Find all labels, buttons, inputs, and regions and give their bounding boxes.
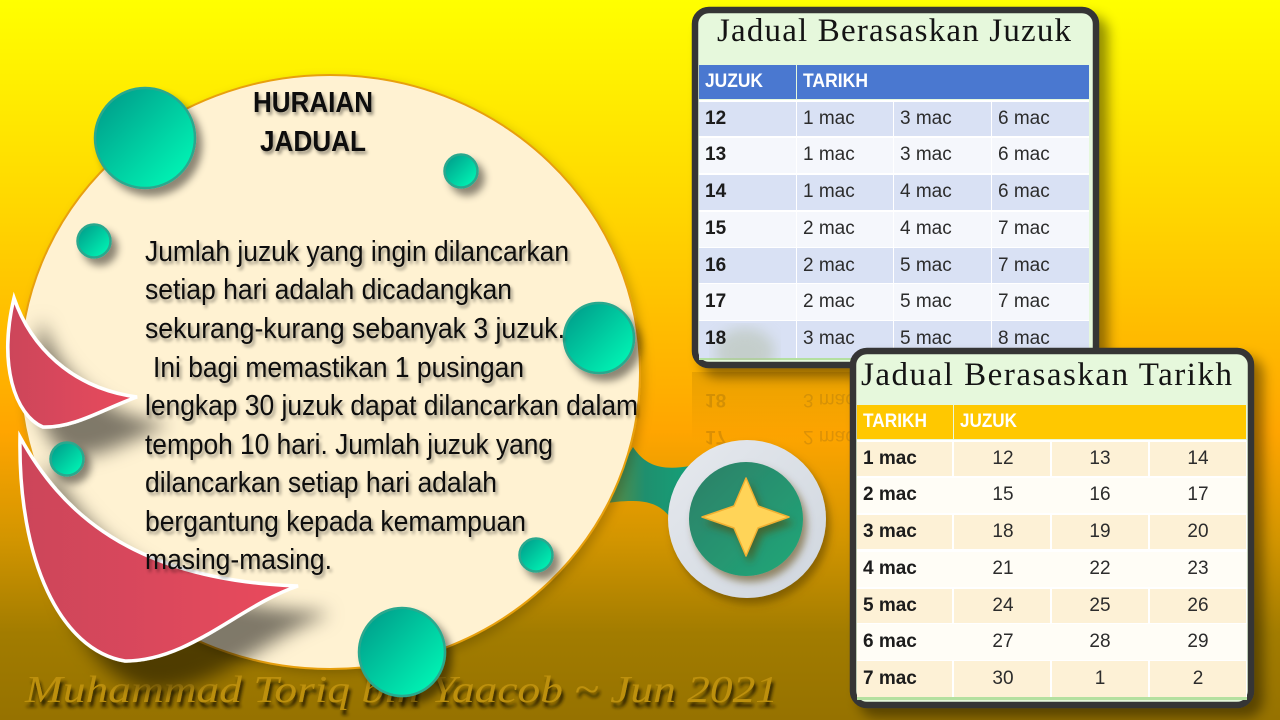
- table grid: juzuk rows: 2 mac: [803, 291, 855, 312]
- table grid: date rows: 1: [1095, 668, 1105, 689]
- shape: lower red fin: [20, 437, 298, 661]
- table grid: date rows: 5 mac: [863, 595, 917, 616]
- table grid: date rows: 16: [1089, 484, 1111, 505]
- body text: masing-masing.: [145, 544, 332, 576]
- table grid: date rows: 30: [992, 668, 1014, 689]
- table grid: juzuk rows: 7 mac: [998, 291, 1050, 312]
- reflection of table: 18: [705, 389, 726, 410]
- title: table by date: Jadual Berasaskan Tarikh: [861, 357, 1232, 393]
- reflection of table: 17: [705, 426, 726, 447]
- reflection of table: 3 mac: [803, 389, 855, 410]
- table grid: juzuk rows: 18: [705, 328, 726, 349]
- table grid: date rows: 28: [1089, 631, 1111, 652]
- table grid: juzuk rows: 16: [705, 255, 726, 276]
- table grid: juzuk rows: 7 mac: [998, 255, 1050, 276]
- table grid: juzuk rows: 13: [705, 144, 726, 165]
- title: table by juzuk: Jadual Berasaskan Juzuk: [717, 13, 1072, 49]
- table grid: date rows: 1 mac: [863, 448, 917, 469]
- table grid: date rows: 27: [992, 631, 1014, 652]
- table grid: juzuk rows: 17: [705, 291, 726, 312]
- body text: bergantung kepada kemampuan: [145, 506, 526, 538]
- table grid: date rows: 24: [992, 595, 1014, 616]
- table grid: juzuk rows: 5 mac: [900, 291, 952, 312]
- table grid: date rows: 26: [1187, 595, 1209, 616]
- reflection of table: 2 mac: [803, 426, 855, 447]
- table grid: juzuk rows: 3 mac: [900, 108, 952, 129]
- connector: [600, 447, 690, 520]
- table grid: date rows: 17: [1187, 484, 1209, 505]
- panel: description circle: [20, 75, 640, 669]
- table grid: date rows: 22: [1089, 558, 1111, 579]
- table grid: date rows: 4 mac: [863, 558, 917, 579]
- table grid: juzuk rows: JUZUK: [705, 71, 763, 92]
- table grid: date rows: 3 mac: [863, 521, 917, 542]
- body text: sekurang-kurang sebanyak 3 juzuk.: [145, 313, 565, 345]
- panel: table by date: [853, 351, 1251, 705]
- shape: upper red fin: [8, 298, 137, 427]
- table grid: date rows: 12: [992, 448, 1014, 469]
- table grid: juzuk rows: 5 mac: [900, 255, 952, 276]
- table grid: date rows: JUZUK: [960, 411, 1017, 432]
- table grid: date rows: 2: [1193, 668, 1203, 689]
- heading: HURAIAN: [253, 87, 373, 119]
- table grid: date rows: 29: [1187, 631, 1209, 652]
- table grid: date rows: 7 mac: [863, 668, 917, 689]
- table grid: date rows: TARIKH: [863, 411, 927, 432]
- table grid: date rows: 19: [1089, 521, 1111, 542]
- heading: JADUAL: [260, 126, 366, 158]
- icon: star medallion: [668, 440, 826, 598]
- table grid: juzuk rows: 4 mac: [900, 181, 952, 202]
- body text: Jumlah juzuk yang ingin dilancarkan: [145, 236, 569, 268]
- table grid: juzuk rows: 5 mac: [900, 328, 952, 349]
- table grid: juzuk rows: 6 mac: [998, 181, 1050, 202]
- body text: tempoh 10 hari. Jumlah juzuk yang: [145, 429, 553, 461]
- table grid: juzuk rows: [699, 65, 1089, 376]
- panel: table by juzuk: [695, 10, 1096, 376]
- table grid: juzuk rows: 2 mac: [803, 255, 855, 276]
- body text: [145, 236, 638, 576]
- table grid: juzuk rows: 1 mac: [803, 108, 855, 129]
- body text: setiap hari adalah dicadangkan: [145, 274, 512, 306]
- table grid: date rows: 6 mac: [863, 631, 917, 652]
- table grid: date rows: 15: [992, 484, 1014, 505]
- reflection of table: [692, 372, 855, 447]
- table grid: date rows: 2 mac: [863, 484, 917, 505]
- table grid: juzuk rows: TARIKH: [803, 71, 868, 92]
- table grid: date rows: 14: [1187, 448, 1209, 469]
- table grid: date rows: 13: [1089, 448, 1111, 469]
- table grid: juzuk rows: 3 mac: [803, 328, 855, 349]
- body text: lengkap 30 juzuk dapat dilancarkan dalam: [145, 390, 638, 422]
- body text: Ini bagi memastikan 1 pusingan: [153, 352, 524, 384]
- table grid: juzuk rows: 6 mac: [998, 108, 1050, 129]
- table grid: juzuk rows: 15: [705, 218, 727, 239]
- table grid: juzuk rows: 1 mac: [803, 144, 855, 165]
- body text: dilancarkan setiap hari adalah: [145, 467, 497, 499]
- table grid: date rows: 23: [1187, 558, 1209, 579]
- table grid: date rows: 25: [1089, 595, 1111, 616]
- table grid: juzuk rows: 6 mac: [998, 144, 1050, 165]
- decorative teal dots: [50, 88, 634, 696]
- table grid: juzuk rows: 4 mac: [900, 218, 952, 239]
- table grid: date rows: 21: [992, 558, 1014, 579]
- table grid: juzuk rows: 8 mac: [998, 328, 1050, 349]
- table grid: date rows: 18: [992, 521, 1014, 542]
- table grid: juzuk rows: 12: [705, 108, 726, 129]
- footer credit: Muhammad Toriq bin Yaacob ~ Jun 2021: [24, 669, 778, 711]
- table grid: juzuk rows: 3 mac: [900, 144, 952, 165]
- table grid: date rows: [857, 405, 1247, 700]
- table grid: date rows: 20: [1187, 521, 1209, 542]
- table grid: juzuk rows: 7 mac: [998, 218, 1050, 239]
- heading: [253, 87, 373, 158]
- table grid: juzuk rows: 2 mac: [803, 218, 855, 239]
- table grid: juzuk rows: 14: [705, 181, 727, 202]
- table grid: juzuk rows: 1 mac: [803, 181, 855, 202]
